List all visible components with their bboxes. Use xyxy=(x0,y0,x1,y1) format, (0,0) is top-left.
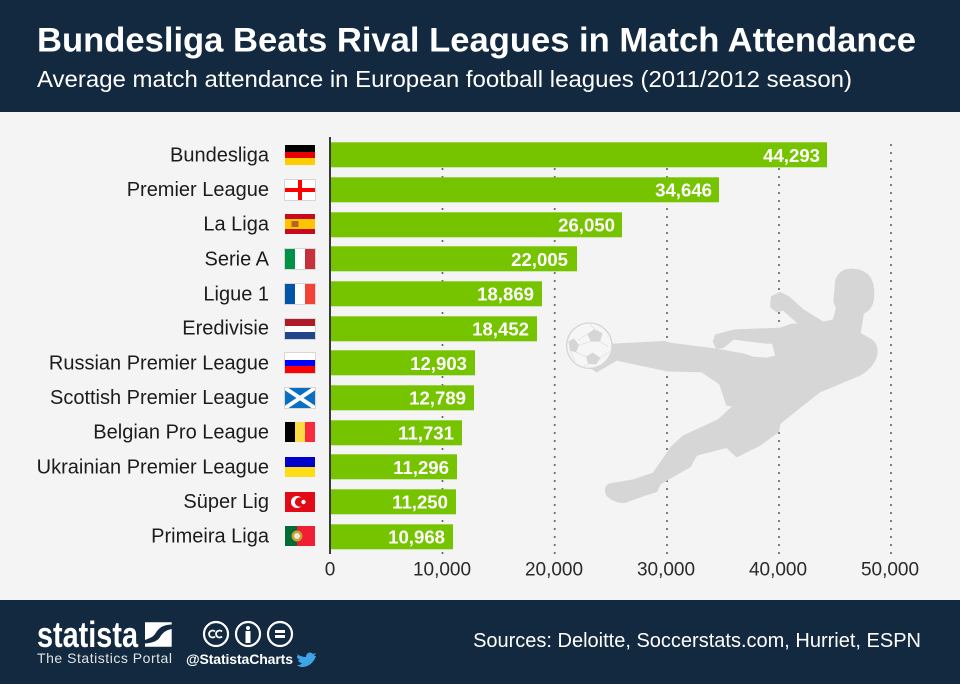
league labels: Premier League xyxy=(127,179,269,201)
flag: Netherlands xyxy=(284,318,316,340)
flag: Ukraine xyxy=(285,457,315,477)
flag: Turkey xyxy=(285,492,315,512)
vertical axis line xyxy=(329,137,331,554)
bar: Süper Lig xyxy=(331,489,456,514)
flag: Belgium xyxy=(285,422,315,442)
vertical dotted gridlines xyxy=(442,144,891,554)
logo mark xyxy=(145,622,172,647)
bar: Premier League xyxy=(331,177,719,202)
league labels: Russian Premier League xyxy=(49,353,269,375)
league labels: La Liga xyxy=(203,214,270,236)
sources: Sources: Deloitte, Soccerstats.com, Hurriet, ESPN xyxy=(473,630,921,652)
x axis labels xyxy=(325,560,919,580)
flag: Germany xyxy=(285,145,315,165)
flag: England xyxy=(284,180,316,200)
x axis labels: 20,000 xyxy=(525,560,583,580)
statista logo: statista xyxy=(37,614,139,655)
league labels: Scottish Premier League xyxy=(50,387,269,409)
bar: Ukrainian Premier League xyxy=(331,454,457,479)
x axis labels: 40,000 xyxy=(749,560,807,580)
x axis labels: 30,000 xyxy=(637,560,695,580)
flag: Russia xyxy=(284,352,316,374)
bar: Eredivisie xyxy=(331,316,537,341)
flag: Portugal xyxy=(285,526,315,546)
subtitle: Average match attendance in European football leagues (2011/2012 season) xyxy=(37,66,852,92)
bar: La Liga xyxy=(331,212,622,237)
league labels: Ukrainian Premier League xyxy=(37,457,269,479)
bar: Belgian Pro League xyxy=(331,420,462,445)
x axis labels: 10,000 xyxy=(413,560,471,580)
bar: Russian Premier League: 12,903 xyxy=(410,353,467,374)
bar: Primeira Liga: 10,968 xyxy=(388,526,445,547)
flag: Scotland xyxy=(284,388,316,408)
flag: Italy xyxy=(284,248,316,270)
league labels: Belgian Pro League xyxy=(93,422,269,444)
bar: Ukrainian Premier League: 11,296 xyxy=(393,457,449,478)
x axis labels: 50,000 xyxy=(861,560,919,580)
league labels: Ligue 1 xyxy=(203,284,269,306)
flag: Spain xyxy=(285,214,315,234)
footer band xyxy=(0,600,960,684)
bar: Premier League: 34,646 xyxy=(655,179,712,200)
bar: Ligue 1: 18,869 xyxy=(477,283,534,304)
bar: Scottish Premier League: 12,789 xyxy=(409,387,466,408)
league labels: Süper Lig xyxy=(183,491,269,513)
bar: Serie A: 22,005 xyxy=(511,249,568,270)
league labels: Primeira Liga xyxy=(151,526,270,548)
bar: Scottish Premier League xyxy=(331,385,474,410)
bars with values xyxy=(331,142,827,549)
soccer ball xyxy=(567,323,612,368)
statista logo: The Statistics Portal xyxy=(37,650,172,666)
league labels xyxy=(37,145,270,548)
bar: Primeira Liga xyxy=(331,524,453,549)
icon: twitter bird xyxy=(297,653,316,667)
title: Bundesliga Beats Rival Leagues in Match Attendance xyxy=(37,22,916,60)
league labels: Bundesliga xyxy=(170,145,270,167)
chart background xyxy=(0,112,960,600)
flags xyxy=(284,145,316,546)
twitter handle: @StatistaCharts xyxy=(186,651,293,667)
bar: Bundesliga xyxy=(331,142,827,167)
bar: Serie A xyxy=(331,246,577,271)
league labels: Eredivisie xyxy=(182,318,269,340)
flag: France xyxy=(284,284,316,304)
bar: Eredivisie: 18,452 xyxy=(472,318,529,339)
bar: Bundesliga: 44,293 xyxy=(763,145,820,166)
bar: Russian Premier League xyxy=(331,350,475,375)
x axis labels: 0 xyxy=(325,560,335,580)
creative commons icons xyxy=(204,622,292,646)
bar: Süper Lig: 11,250 xyxy=(392,491,448,512)
football player silhouette with ball xyxy=(567,269,877,502)
bar: Ligue 1 xyxy=(331,281,542,306)
header band xyxy=(0,0,960,112)
league labels: Serie A xyxy=(205,249,270,271)
bar: La Liga: 26,050 xyxy=(558,214,615,235)
bar: Belgian Pro League: 11,731 xyxy=(398,422,454,443)
